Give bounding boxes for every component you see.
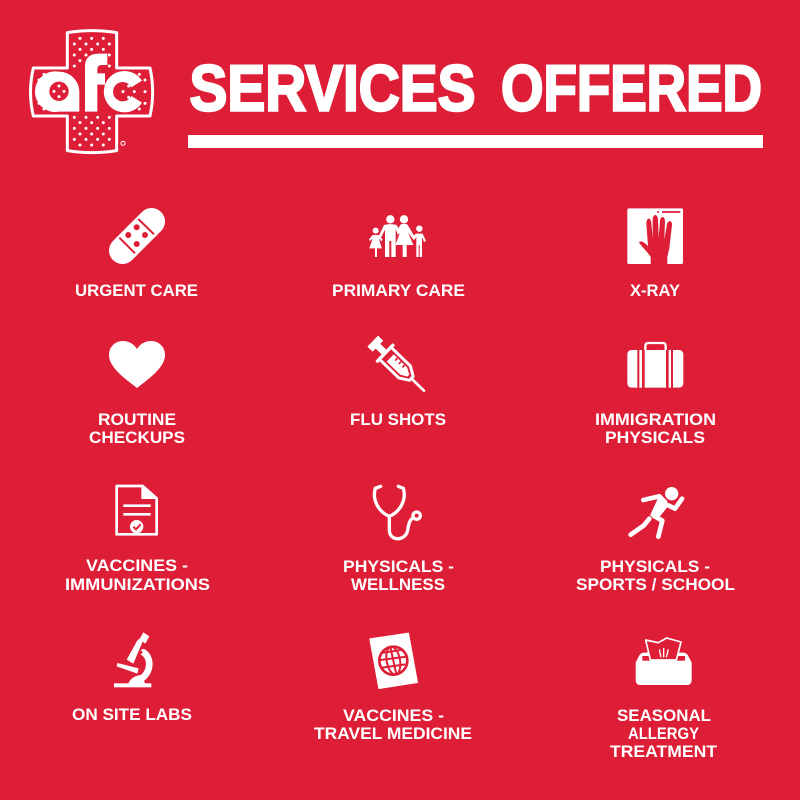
label: CHECKUPS bbox=[89, 429, 185, 447]
label: FLU SHOTS bbox=[350, 411, 446, 429]
icon: syringe bbox=[364, 332, 433, 400]
label bbox=[595, 411, 716, 447]
service: vaccines travel medicine bbox=[314, 633, 472, 743]
icon: passport with globe bbox=[370, 633, 417, 688]
label: IMMUNIZATIONS bbox=[65, 576, 210, 594]
service: routine checkups bbox=[89, 341, 185, 447]
title: SERVICES bbox=[190, 52, 476, 124]
label: PHYSICALS - bbox=[600, 558, 710, 576]
label bbox=[314, 707, 472, 743]
title bbox=[190, 52, 762, 124]
label: SPORTS / SCHOOL bbox=[576, 576, 735, 594]
label: PHYSICALS bbox=[605, 429, 705, 447]
service: flu shots bbox=[350, 332, 446, 429]
label: PHYSICALS - bbox=[343, 558, 454, 576]
icon: stethoscope bbox=[374, 486, 420, 539]
service: vaccines immunizations bbox=[65, 486, 210, 594]
service: urgent care bbox=[75, 202, 198, 300]
label: ON SITE LABS bbox=[72, 706, 192, 724]
service: immigration physicals bbox=[595, 343, 716, 447]
label: IMMIGRATION bbox=[595, 411, 716, 429]
label bbox=[576, 558, 735, 594]
icon: briefcase bbox=[627, 343, 683, 388]
label: X-RAY bbox=[630, 282, 680, 300]
service: primary care bbox=[332, 215, 465, 300]
label bbox=[65, 557, 210, 594]
label: TRAVEL MEDICINE bbox=[314, 725, 472, 743]
label: URGENT CARE bbox=[75, 282, 198, 300]
icon: runner bbox=[631, 487, 682, 537]
icon: microscope bbox=[114, 632, 151, 687]
logo: afc cross bbox=[30, 31, 153, 153]
label: VACCINES - bbox=[343, 707, 444, 725]
label: PRIMARY CARE bbox=[332, 282, 465, 300]
icon: bandage bbox=[103, 202, 171, 270]
service: seasonal allergy treatment bbox=[610, 638, 717, 761]
label bbox=[89, 411, 185, 447]
icon: tissue box bbox=[636, 638, 692, 685]
icon: hand x-ray bbox=[627, 208, 683, 264]
label: WELLNESS bbox=[351, 576, 445, 594]
service: x-ray bbox=[627, 208, 683, 300]
service: physicals sports school bbox=[576, 487, 735, 594]
label: SEASONAL bbox=[617, 707, 711, 725]
label bbox=[610, 707, 717, 761]
service: physicals wellness bbox=[343, 486, 454, 594]
icon: heart bbox=[109, 341, 165, 388]
label: ROUTINE bbox=[98, 411, 176, 429]
icon: family bbox=[369, 215, 426, 257]
label: VACCINES - bbox=[86, 557, 188, 575]
title underline bbox=[188, 135, 763, 148]
label: TREATMENT bbox=[610, 743, 717, 761]
label: ALLERGY bbox=[628, 725, 699, 743]
label bbox=[343, 558, 454, 594]
service: on site labs bbox=[72, 632, 192, 724]
icon: document with check bbox=[117, 486, 157, 534]
